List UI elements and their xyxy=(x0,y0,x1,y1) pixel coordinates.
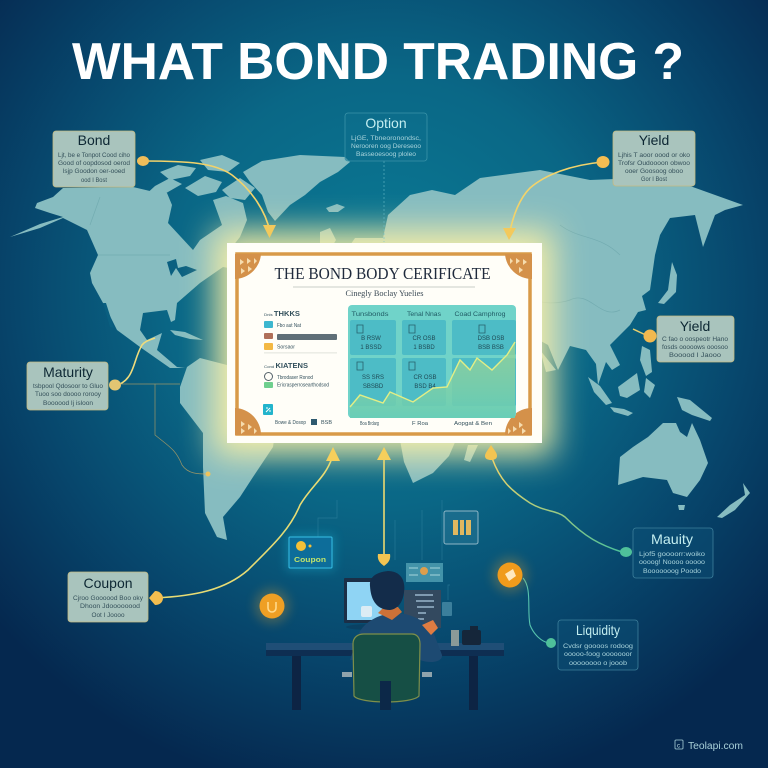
callout: Maturity right: Ljof5 goooorr:woiko xyxy=(639,551,705,558)
workstation scene xyxy=(266,571,504,710)
certificate chart panel: Coad Camphrog xyxy=(454,311,506,318)
callout: Maturity right: Mauity xyxy=(651,531,693,547)
connector: Bond xyxy=(137,156,276,238)
connector: Liquidity xyxy=(523,578,556,648)
callout: Maturity left: tsbpool Qdosoor to Gluo xyxy=(33,383,103,390)
callout: Liquidity: Cvdsr goooos rodoog xyxy=(563,643,633,650)
callout: Liquidity xyxy=(558,620,638,670)
certificate title: THE BOND BODY CERIFICATE xyxy=(274,264,490,283)
certificate footer: BSB xyxy=(321,420,332,426)
certificate chart panel: 1 BSBD xyxy=(413,345,435,351)
certificate chart panel: B RSW xyxy=(361,336,381,342)
certificate left column: Ericrasperrosearthodsod xyxy=(277,382,329,388)
connector: Yield top xyxy=(503,156,610,240)
certificate chart panel: 1 BSSD xyxy=(360,345,382,351)
callout: Option: Option xyxy=(365,115,407,131)
footer credit: c xyxy=(677,744,680,750)
certificate footer xyxy=(275,419,492,427)
certificate left column: Fbo aut Nat xyxy=(277,323,301,329)
callout: Maturity right: oooog! Noooo ooooo xyxy=(639,559,705,566)
certificate chart panel: DSB OSB xyxy=(478,336,504,342)
certificate chart panel xyxy=(348,305,516,418)
certificate left column: Sorsaor xyxy=(277,344,295,350)
callout: Coupon xyxy=(68,572,148,622)
certificate footer: Bowe & Dosop xyxy=(275,420,306,426)
callout: Option: LjGE, Tbneoronondsc, xyxy=(351,135,421,142)
callout: Liquidity: ooooo-foog ooooooor xyxy=(564,651,633,658)
callout: Yield top: Trofsr Oudoooon obwoo xyxy=(618,160,690,167)
faint circuit lines xyxy=(318,500,450,600)
icon: orange coin xyxy=(492,557,528,593)
coffee cup and camera xyxy=(451,626,481,646)
callout: Yield right: Yield xyxy=(680,318,710,334)
certificate chart panel: Tunsbonds xyxy=(352,311,389,318)
callout: Yield right: fosds ooooows ooosoo xyxy=(662,344,728,351)
panel: certificate xyxy=(227,243,542,443)
certificate chart panel: SS SRS xyxy=(362,375,384,381)
callout: Option: Nerooren oog Dereseoo xyxy=(351,143,421,150)
callout: Yield right: C fao o oospeotr Hano xyxy=(662,336,728,343)
certificate subtitle: Cinegly Boclay Yuelies xyxy=(346,289,424,298)
icon: orange power coin xyxy=(254,588,290,624)
certificate footer: F Roa xyxy=(412,421,429,427)
certificate chart panel: CR OSB xyxy=(413,375,437,381)
certificate chart panel: BSD B4 xyxy=(414,384,436,390)
connector: Option xyxy=(383,161,385,242)
title: WHAT BOND TRADING ? xyxy=(72,33,684,91)
callout: Yield right: Booood I Jaooo xyxy=(669,352,721,359)
person xyxy=(350,571,442,662)
desk xyxy=(266,643,504,710)
certificate left column xyxy=(263,311,337,415)
callout: Yield right xyxy=(657,316,734,362)
callout: Bond: lsjp Goodon oer-ooed xyxy=(63,168,125,175)
icon: coupon card xyxy=(286,534,335,571)
connector: center xyxy=(377,447,391,566)
connector: Maturity left xyxy=(109,338,210,476)
callout: Yield top: ooer Goosoog oboo xyxy=(625,168,683,175)
certificate left column: Cond KIATENS xyxy=(264,363,308,370)
certificate chart panel: BSB BSB xyxy=(478,345,504,351)
callout: Yield top xyxy=(613,131,695,186)
callout: Coupon: Coupon xyxy=(83,575,133,591)
callout: Bond: ood I Bost xyxy=(81,177,107,184)
callout: Maturity right: Booooooog Poodo xyxy=(643,568,701,575)
certificate chart panel: SBSBD xyxy=(363,384,384,390)
certificate footer: Boa Brdarg xyxy=(360,421,379,427)
yield line xyxy=(350,342,515,418)
certificate chart panel: Tenal Nnas xyxy=(407,311,442,318)
chair xyxy=(342,634,432,710)
callout: Maturity right xyxy=(633,528,713,578)
callout: Bond: Good of oopdosod oerod xyxy=(58,160,130,167)
callout: Maturity left: Boooood Ij isloon xyxy=(43,400,93,407)
callout: Liquidity: Liquidity xyxy=(576,622,620,638)
callout: Bond: Ljt, be e Tonpot Cood ciho xyxy=(58,152,130,159)
callout: Liquidity: oooooooo o jooob xyxy=(569,660,627,667)
connector: Yield right xyxy=(633,329,656,342)
icon: building box xyxy=(444,511,478,544)
callout: Coupon: Cjroo Goooood Boo oky xyxy=(73,595,144,602)
footer credit: Teolapi.com xyxy=(688,741,743,752)
monitor xyxy=(344,578,398,630)
callout: Yield top: Yield xyxy=(639,132,669,148)
certificate glow xyxy=(214,230,554,456)
callout: Maturity left: Maturity xyxy=(43,364,93,380)
second screen xyxy=(404,590,452,628)
icon: coupon card: Coupon xyxy=(294,557,326,564)
callout: Bond xyxy=(53,131,135,187)
callout: Bond: Bond xyxy=(78,132,110,148)
icon: floating chart card xyxy=(406,563,443,582)
certificate left column: Tbrodaser Ronod xyxy=(277,375,313,381)
callout: Coupon: Dhoon Jdoooooood xyxy=(80,603,140,610)
callout: Option xyxy=(345,113,427,161)
world map xyxy=(10,155,750,540)
callout: Option: Basseoesoog ploleo xyxy=(356,151,416,158)
callout: Coupon: Oot I Joooo xyxy=(92,612,125,619)
certificate left column: Dnis THKKS xyxy=(264,311,300,318)
certificate footer: Aopgat & Ben xyxy=(454,421,492,427)
callout: Yield top: Ljhis T aoor oood or oko xyxy=(618,152,690,159)
certificate frame xyxy=(235,254,532,435)
connector: Maturity right xyxy=(485,445,632,557)
callout: Yield top: Gor I Bost xyxy=(641,176,667,183)
certificate chart panel: CR OSB xyxy=(412,336,436,342)
connector: Coupon xyxy=(149,447,340,605)
callout: Maturity left: Tuoo soo doooo rorooy xyxy=(35,391,102,398)
callout: Maturity left xyxy=(27,362,108,410)
